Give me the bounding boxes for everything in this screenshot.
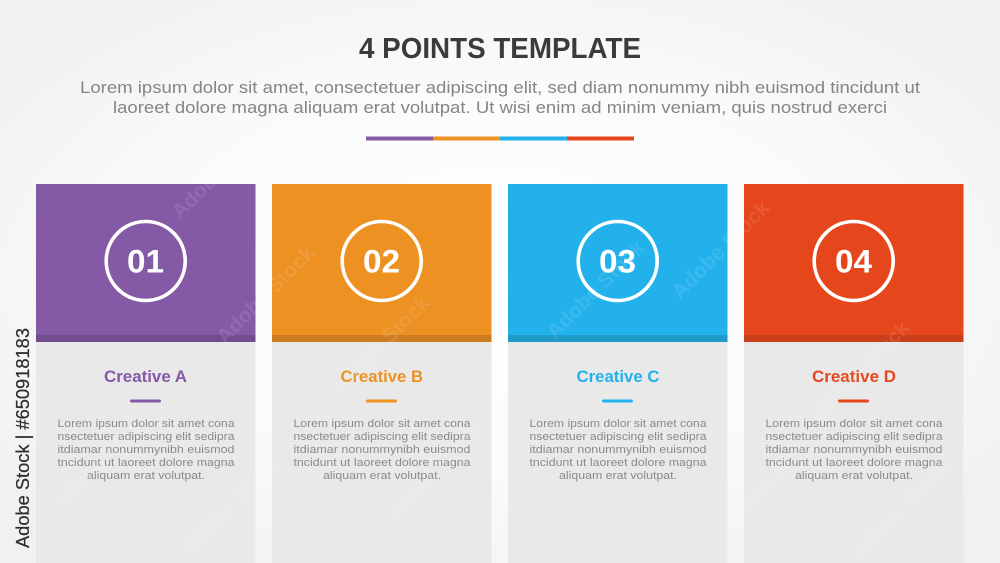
- body text: Lorem ipsum dolor sit amet cona: [530, 418, 707, 430]
- heading Creative B: Creative B: [340, 367, 423, 386]
- watermark pattern: Adobe Stock: [327, 291, 435, 399]
- body text: tncidunt ut laoreet dolore magna: [766, 457, 943, 469]
- watermark pattern: Adobe Stock: [212, 241, 320, 349]
- body text: itdiamar nonummynibh euismod: [294, 444, 470, 456]
- body text: aliquam erat volutpat.: [323, 470, 441, 482]
- watermark pattern: Adobe Stock: [542, 236, 650, 344]
- watermark pattern: Adobe Stock: [667, 196, 775, 304]
- heading Creative A: Creative A: [104, 367, 187, 386]
- number badge 03: [578, 222, 657, 300]
- body text: tncidunt ut laoreet dolore magna: [294, 457, 471, 469]
- body text: Lorem ipsum dolor sit amet cona: [766, 418, 943, 430]
- accent bar: [366, 400, 397, 402]
- body text: Lorem ipsum dolor sit amet cona: [294, 418, 471, 430]
- number badge 03: 03: [599, 244, 636, 280]
- body text: itdiamar nonummynibh euismod: [766, 444, 942, 456]
- body text: tncidunt ut laoreet dolore magna: [530, 457, 707, 469]
- number badge 04: [814, 222, 893, 300]
- subtitle text: Lorem ipsum dolor sit amet, consectetuer adipiscing elit, sed diam nonummy nibh euismod tincidunt ut: [80, 78, 920, 97]
- number badge 02: 02: [363, 244, 400, 280]
- watermark pattern: Adobe Stock: [717, 426, 825, 534]
- body text: itdiamar nonummynibh euismod: [530, 444, 706, 456]
- body text: [294, 418, 471, 482]
- number badge 04: 04: [835, 244, 872, 280]
- number badge 01: [106, 222, 185, 300]
- panel: Creative B: [272, 184, 492, 563]
- watermark pattern: Adobe Stock: [847, 456, 955, 563]
- number badge 01: 01: [127, 244, 164, 280]
- body text: aliquam erat volutpat.: [559, 470, 677, 482]
- body text: nsectetuer adipiscing elit sedipra: [294, 431, 471, 443]
- panel: Creative D: [744, 184, 964, 563]
- body text: nsectetuer adipiscing elit sedipra: [58, 431, 235, 443]
- accent bar: [130, 400, 161, 402]
- heading Creative C: Creative C: [576, 367, 660, 386]
- panel: Creative C: [508, 184, 728, 563]
- watermark pattern: Adobe Stock: [177, 451, 285, 559]
- number badge 02: [342, 222, 421, 300]
- body text: nsectetuer adipiscing elit sedipra: [530, 431, 707, 443]
- vertical stock credit: Adobe Stock | #650918183: [13, 328, 33, 548]
- body text: tncidunt ut laoreet dolore magna: [58, 457, 235, 469]
- subtitle text: laoreet dolore magna aliquam erat volutpat. Ut wisi enim ad minim veniam, quis nostrud exerci: [113, 98, 887, 117]
- four-colour divider: [366, 136, 634, 140]
- body text: nsectetuer adipiscing elit sedipra: [766, 431, 943, 443]
- title: 4 POINTS TEMPLATE: [359, 33, 641, 65]
- watermark pattern: Adobe Stock: [167, 116, 275, 224]
- watermark pattern: Adobe Stock: [807, 316, 915, 424]
- body text: [766, 418, 943, 482]
- body text: [58, 418, 235, 482]
- accent bar: [838, 400, 869, 402]
- body text: itdiamar nonummynibh euismod: [58, 444, 234, 456]
- watermark pattern: Adobe Stock: [47, 406, 155, 514]
- body text: [530, 418, 707, 482]
- watermark pattern: [47, 116, 955, 563]
- accent bar: [602, 400, 633, 402]
- watermark pattern: Adobe Stock: [382, 418, 490, 526]
- body text: aliquam erat volutpat.: [87, 470, 205, 482]
- panel: Creative A: [36, 184, 256, 563]
- body text: aliquam erat volutpat.: [795, 470, 913, 482]
- heading Creative D: Creative D: [812, 367, 896, 386]
- body text: Lorem ipsum dolor sit amet cona: [58, 418, 235, 430]
- subtitle text: [80, 78, 920, 117]
